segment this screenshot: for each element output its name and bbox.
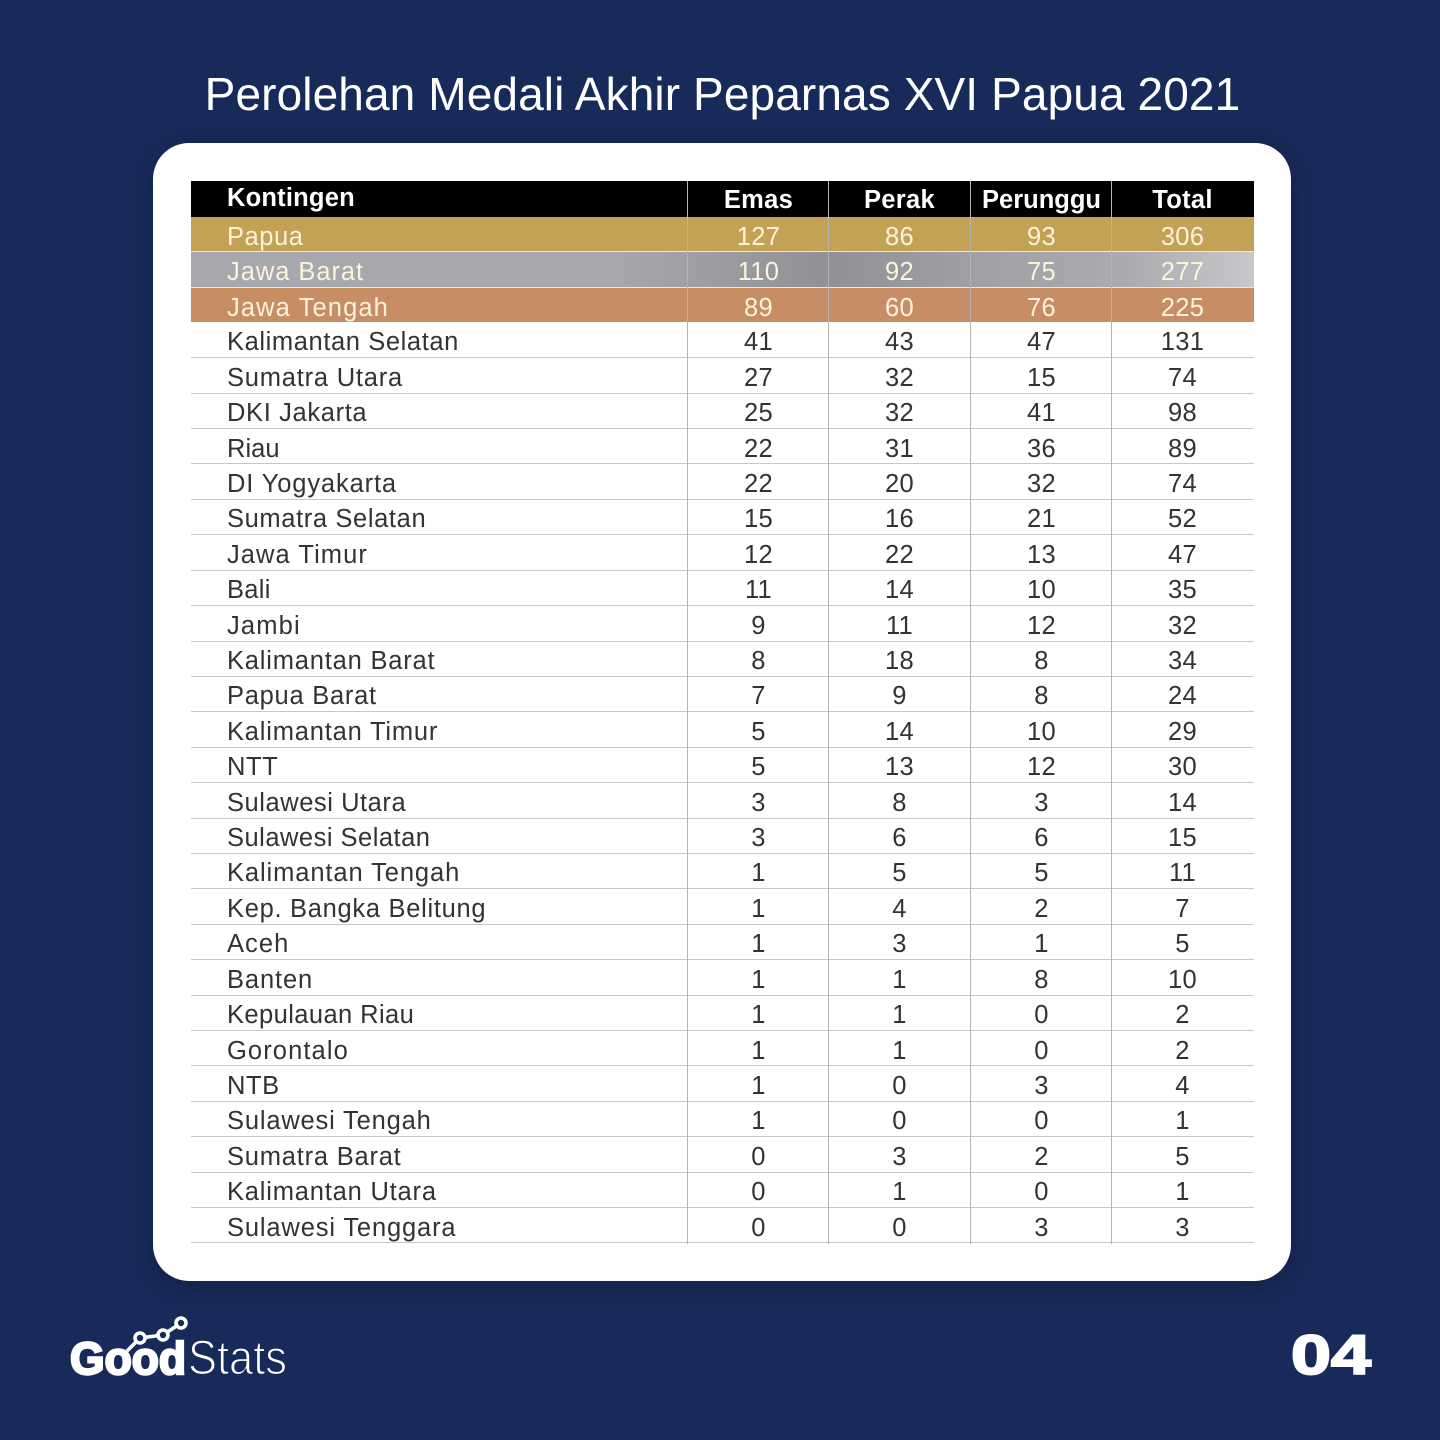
- row: Kepulauan Riau: 2: [1175, 1001, 1190, 1029]
- row: Kep. Bangka Belitung: Kep. Bangka Belitung: [227, 895, 486, 923]
- row: Jawa Timur: [191, 535, 1254, 571]
- row: Jawa Barat (silver): 75: [1027, 258, 1056, 286]
- row: Kalimantan Tengah: 5: [892, 859, 907, 887]
- table header: Emas: [724, 186, 793, 214]
- row: Sulawesi Tenggara: Sulawesi Tenggara: [227, 1214, 456, 1242]
- row: Aceh: 5: [1175, 930, 1190, 958]
- row: DI Yogyakarta: DI Yogyakarta: [227, 470, 397, 498]
- row: Riau: 89: [1168, 435, 1197, 463]
- row: Bali: 14: [885, 576, 914, 604]
- row: Gorontalo: 2: [1175, 1037, 1190, 1065]
- row: Sulawesi Selatan: Sulawesi Selatan: [227, 824, 430, 852]
- row: Sulawesi Utara: 3: [1034, 789, 1049, 817]
- row: NTT: NTT: [227, 753, 278, 781]
- row: Kalimantan Utara: 0: [1034, 1178, 1049, 1206]
- row: Kalimantan Timur: Kalimantan Timur: [227, 718, 438, 746]
- row: Kep. Bangka Belitung: 2: [1034, 895, 1049, 923]
- row: Kalimantan Timur: 29: [1168, 718, 1197, 746]
- row: Papua Barat: 7: [751, 682, 766, 710]
- row: Papua Barat: 24: [1168, 682, 1197, 710]
- row: Kalimantan Selatan: Kalimantan Selatan: [227, 328, 459, 356]
- row: Sulawesi Selatan: [191, 818, 1254, 854]
- row: Sumatra Barat: 0: [751, 1143, 766, 1171]
- row: Papua Barat: Papua Barat: [227, 682, 377, 710]
- row: Sulawesi Selatan: 15: [1168, 824, 1197, 852]
- row: Sulawesi Utara: 3: [751, 789, 766, 817]
- row: Kep. Bangka Belitung: [191, 889, 1254, 925]
- row: Jambi: [191, 606, 1254, 642]
- row: Kalimantan Selatan: 43: [885, 328, 914, 356]
- logo: GoodStats: [70, 1316, 287, 1385]
- row: Aceh: [191, 924, 1254, 960]
- row: Gorontalo: 1: [751, 1037, 766, 1065]
- row: Jawa Timur: 22: [885, 541, 914, 569]
- row: Jambi: 12: [1027, 612, 1056, 640]
- row: Sumatra Selatan: [191, 499, 1254, 535]
- row: Bali: 10: [1027, 576, 1056, 604]
- row: Jawa Timur: 47: [1168, 541, 1197, 569]
- row: Kalimantan Barat: 18: [885, 647, 914, 675]
- row: DKI Jakarta: DKI Jakarta: [227, 399, 367, 427]
- row: DKI Jakarta: 98: [1168, 399, 1197, 427]
- row: Sumatra Selatan: 16: [885, 505, 914, 533]
- row: Aceh: 1: [751, 930, 766, 958]
- row: Sulawesi Selatan: 6: [892, 824, 907, 852]
- row: Papua (gold): 93: [1027, 222, 1056, 250]
- row: Kalimantan Utara: 1: [1175, 1178, 1190, 1206]
- row: Sulawesi Tenggara: 3: [1175, 1214, 1190, 1242]
- row: Kalimantan Selatan: [191, 322, 1254, 358]
- row: Kep. Bangka Belitung: 7: [1175, 895, 1190, 923]
- row: DI Yogyakarta: 32: [1027, 470, 1056, 498]
- row: Bali: 35: [1168, 576, 1197, 604]
- row: Kepulauan Riau: 1: [751, 1001, 766, 1029]
- row: Kalimantan Barat: 8: [751, 647, 766, 675]
- row: Sulawesi Utara: 8: [892, 789, 907, 817]
- row: Papua Barat: [191, 676, 1254, 712]
- row: DI Yogyakarta: 20: [885, 470, 914, 498]
- row: Sumatra Utara: 74: [1168, 364, 1197, 392]
- row: NTT: [191, 747, 1254, 783]
- row: Kalimantan Barat: 34: [1168, 647, 1197, 675]
- row: Kep. Bangka Belitung: 4: [892, 895, 907, 923]
- row: DI Yogyakarta: 22: [744, 470, 773, 498]
- logo graph icon: [127, 1318, 186, 1351]
- row: Gorontalo: 0: [1034, 1037, 1049, 1065]
- table header: Perak: [864, 186, 935, 214]
- logo wordmark: Stats: [188, 1332, 287, 1385]
- row: Jawa Barat (silver): 92: [885, 258, 914, 286]
- row: Papua (gold): Papua: [227, 222, 304, 250]
- row: Sumatra Selatan: 15: [744, 505, 773, 533]
- row: Banten: 1: [751, 966, 766, 994]
- row: Jawa Barat (silver): Jawa Barat: [227, 258, 364, 286]
- row: Kalimantan Barat: [191, 641, 1254, 677]
- row: Jawa Barat (silver): [191, 252, 1254, 288]
- logo wordmark: [70, 1332, 287, 1385]
- medal table: [191, 181, 1254, 1244]
- row: Banten: Banten: [227, 966, 313, 994]
- row: Sumatra Barat: 5: [1175, 1143, 1190, 1171]
- row: Jawa Timur: 13: [1027, 541, 1056, 569]
- row: Jambi: 11: [886, 612, 913, 640]
- row: DKI Jakarta: 41: [1027, 399, 1056, 427]
- row: Gorontalo: Gorontalo: [227, 1037, 349, 1065]
- row: Riau: [191, 429, 1254, 464]
- row: Sumatra Utara: 32: [885, 364, 914, 392]
- row: Sulawesi Tenggara: 3: [1034, 1214, 1049, 1242]
- row: NTB: 0: [892, 1072, 907, 1100]
- row: DKI Jakarta: 32: [885, 399, 914, 427]
- row: Sulawesi Tengah: Sulawesi Tengah: [227, 1107, 432, 1135]
- row: Kepulauan Riau: 0: [1034, 1001, 1049, 1029]
- row: Sulawesi Utara: Sulawesi Utara: [227, 789, 406, 817]
- logo wordmark: Good: [70, 1333, 186, 1384]
- row: Banten: 8: [1034, 966, 1049, 994]
- table header: [191, 181, 1254, 216]
- panel: medal table card: [153, 143, 1291, 1281]
- row: Jawa Barat (silver): 110: [738, 258, 779, 286]
- row: Sulawesi Tengah: [191, 1101, 1254, 1137]
- table header: Total: [1152, 186, 1213, 214]
- row: NTT: 5: [751, 753, 766, 781]
- row: Kalimantan Utara: Kalimantan Utara: [227, 1178, 437, 1206]
- row: Kepulauan Riau: 1: [892, 1001, 907, 1029]
- row: Sumatra Barat: 3: [892, 1143, 907, 1171]
- row: Sulawesi Utara: 14: [1168, 789, 1197, 817]
- row: Kalimantan Barat: Kalimantan Barat: [227, 647, 435, 675]
- row: Jawa Tengah (bronze): 76: [1027, 294, 1056, 322]
- row: NTT: 13: [885, 753, 914, 781]
- row: NTB: 1: [751, 1072, 766, 1100]
- row: Kepulauan Riau: Kepulauan Riau: [227, 1001, 414, 1029]
- row: Sumatra Barat: [191, 1137, 1254, 1173]
- row: Sulawesi Utara: [191, 783, 1254, 819]
- row: Kalimantan Selatan: 47: [1027, 328, 1056, 356]
- row: Jambi: 9: [751, 612, 766, 640]
- row: Gorontalo: [191, 1031, 1254, 1066]
- row: Sumatra Selatan: 21: [1027, 505, 1056, 533]
- row: Jawa Tengah (bronze): 89: [744, 294, 773, 322]
- row: Riau: 22: [744, 435, 773, 463]
- row: Kalimantan Tengah: Kalimantan Tengah: [227, 859, 460, 887]
- row: Sumatra Utara: 15: [1027, 364, 1056, 392]
- row: Kalimantan Utara: 0: [751, 1178, 766, 1206]
- row: Sulawesi Tenggara: 0: [892, 1214, 907, 1242]
- row: Kep. Bangka Belitung: 1: [751, 895, 766, 923]
- row: DI Yogyakarta: [191, 464, 1254, 500]
- row: Bali: Bali: [227, 576, 271, 604]
- row: Kalimantan Tengah: 1: [751, 859, 766, 887]
- row: Kalimantan Utara: [191, 1172, 1254, 1208]
- title: Perolehan Medali Akhir Peparnas XVI Papua 2021: [205, 68, 1240, 120]
- row: Sumatra Selatan: 52: [1168, 505, 1197, 533]
- row: Jawa Tengah (bronze): [191, 288, 1254, 322]
- row: Sumatra Barat: Sumatra Barat: [227, 1143, 402, 1171]
- table header: Kontingen: [227, 184, 355, 212]
- row: Jawa Tengah (bronze): 225: [1161, 294, 1204, 322]
- row: Sulawesi Tengah: 1: [751, 1107, 766, 1135]
- row: Sulawesi Selatan: 6: [1034, 824, 1049, 852]
- row: Sulawesi Selatan: 3: [751, 824, 766, 852]
- row: Jawa Timur: 12: [744, 541, 773, 569]
- row: Jawa Tengah (bronze): Jawa Tengah: [227, 294, 389, 322]
- row: Sumatra Utara: Sumatra Utara: [227, 364, 403, 392]
- row: Bali: [191, 570, 1254, 606]
- row: Banten: [191, 960, 1254, 996]
- row: Banten: 1: [892, 966, 907, 994]
- row: DI Yogyakarta: 74: [1168, 470, 1197, 498]
- row: Sulawesi Tengah: 0: [892, 1107, 907, 1135]
- row: Jawa Tengah (bronze): 60: [885, 294, 914, 322]
- row: Kalimantan Timur: 10: [1027, 718, 1056, 746]
- row: Papua (gold): 127: [737, 222, 780, 250]
- row: Riau: 36: [1027, 435, 1056, 463]
- row: NTB: 4: [1175, 1072, 1190, 1100]
- row: Papua Barat: 8: [1034, 682, 1049, 710]
- row: Riau: 31: [885, 435, 914, 463]
- row: NTB: [191, 1066, 1254, 1102]
- row: Aceh: 3: [892, 930, 907, 958]
- row: NTB: NTB: [227, 1072, 280, 1100]
- row: Papua (gold): 306: [1161, 222, 1204, 250]
- row: Sumatra Barat: 2: [1034, 1143, 1049, 1171]
- row: Papua (gold): 86: [885, 222, 914, 250]
- page number: 04: [1291, 1323, 1371, 1386]
- row: Kalimantan Timur: [191, 712, 1254, 748]
- row: Papua Barat: 9: [892, 682, 907, 710]
- row: Sulawesi Tenggara: 0: [751, 1214, 766, 1242]
- row: Kalimantan Timur: 5: [751, 718, 766, 746]
- row: Papua (gold): [191, 216, 1254, 252]
- row: Sumatra Utara: [191, 358, 1254, 394]
- row: NTB: 3: [1034, 1072, 1049, 1100]
- row: Sulawesi Tengah: 1: [1175, 1107, 1190, 1135]
- row: Kalimantan Tengah: [191, 853, 1254, 889]
- row: Sumatra Utara: 27: [744, 364, 773, 392]
- row: Gorontalo: 1: [892, 1037, 907, 1065]
- row: DKI Jakarta: [191, 393, 1254, 429]
- row: Sulawesi Tengah: 0: [1034, 1107, 1049, 1135]
- table header: Perunggu: [982, 186, 1101, 214]
- row: Riau: Riau: [227, 435, 280, 463]
- row: Aceh: Aceh: [227, 930, 289, 958]
- row: Sulawesi Tenggara: [191, 1208, 1254, 1243]
- row: Sumatra Selatan: Sumatra Selatan: [227, 505, 426, 533]
- row: Kalimantan Timur: 14: [885, 718, 914, 746]
- row: NTT: 12: [1027, 753, 1056, 781]
- row: DKI Jakarta: 25: [744, 399, 773, 427]
- row: Bali: 11: [745, 576, 772, 604]
- row: Kalimantan Selatan: 41: [744, 328, 773, 356]
- row: Kalimantan Tengah: 11: [1169, 859, 1196, 887]
- row: Kalimantan Utara: 1: [892, 1178, 907, 1206]
- row: NTT: 30: [1168, 753, 1197, 781]
- row: Kalimantan Barat: 8: [1034, 647, 1049, 675]
- row: Kalimantan Selatan: 131: [1161, 328, 1204, 356]
- row: Jawa Timur: Jawa Timur: [227, 541, 368, 569]
- row: Jambi: 32: [1168, 612, 1197, 640]
- row: Banten: 10: [1168, 966, 1197, 994]
- row: Jawa Barat (silver): 277: [1161, 258, 1204, 286]
- row: Kepulauan Riau: [191, 995, 1254, 1031]
- row: Aceh: 1: [1034, 930, 1049, 958]
- row: Kalimantan Tengah: 5: [1034, 859, 1049, 887]
- row: Jambi: Jambi: [227, 612, 301, 640]
